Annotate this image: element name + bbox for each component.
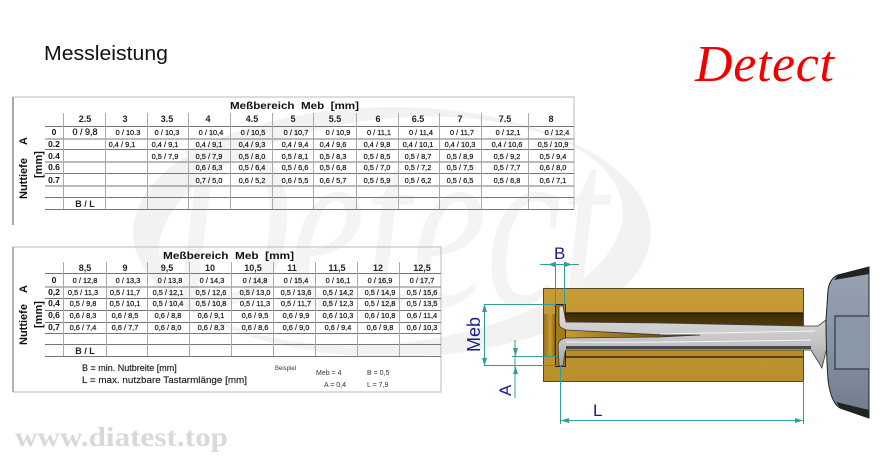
table values: 0,5 / 14,2 xyxy=(323,288,353,297)
column headers: 10,5 xyxy=(244,263,262,273)
table values: 0,5 / 9,2 xyxy=(494,152,520,161)
row headers: 0,2 xyxy=(48,287,60,297)
table values: 0 / 12,8 xyxy=(73,276,97,285)
row headers: 0.2 xyxy=(48,139,60,149)
table values: 0 / 10,9 xyxy=(326,128,350,137)
table values: 0,5 / 11,7 xyxy=(110,288,140,297)
table values: 0 / 10,4 xyxy=(199,128,223,137)
table values: 0,5 / 13,0 xyxy=(240,288,270,297)
axis label: Nuttiefe A: [mm] xyxy=(33,301,45,328)
table values: 0,6 / 9,9 xyxy=(283,311,309,320)
column headers: 5.5 xyxy=(329,114,341,124)
table values: 0 / 13,8 xyxy=(158,276,182,285)
example values: L = 7,9 xyxy=(367,382,388,389)
column headers: 9 xyxy=(122,263,128,273)
table values: 0,6 / 8,8 xyxy=(155,311,181,320)
column headers: 7.5 xyxy=(499,114,511,124)
column headers: 6.5 xyxy=(412,114,424,124)
table values: 0,6 / 5,5 xyxy=(282,176,308,185)
column headers: B / L xyxy=(75,346,95,356)
dimension label: Meb: Meb xyxy=(464,317,484,352)
table values: 0,5 / 10,4 xyxy=(153,299,183,308)
column headers: 5 xyxy=(290,114,296,124)
table values: 0,4 / 9,1 xyxy=(196,140,222,149)
table values: 0 / 12,1 xyxy=(496,128,520,137)
table values: 0 / 16,1 xyxy=(326,276,350,285)
table values: 0,5 / 8,7 xyxy=(405,152,431,161)
table values: 0,6 / 6,3 xyxy=(196,163,222,172)
watermark: Detect oval logo: Detect xyxy=(166,91,612,357)
column headers: 11,5 xyxy=(328,263,346,273)
table values: 0,6 / 8,3 xyxy=(198,323,224,332)
table values: 0 / 10,3 xyxy=(155,128,179,137)
heading: Meßbereich Meb: Meßbereich Meb [mm] xyxy=(163,250,294,262)
table values: 0,6 / 8,0 xyxy=(155,323,181,332)
table values: 0,4 / 9,3 xyxy=(239,140,265,149)
table values: 0,5 / 12,1 xyxy=(153,288,183,297)
axis label: Nuttiefe A xyxy=(18,285,45,345)
table values: 0,5 / 6,8 xyxy=(320,163,346,172)
column headers: 2.5 xyxy=(79,114,91,124)
table values: 0,4 / 10,1 xyxy=(403,140,433,149)
table values: 0,5 / 8,3 xyxy=(320,152,346,161)
table values: 0,6 / 7,7 xyxy=(112,323,138,332)
table values: 0,5 / 7,9 xyxy=(196,152,222,161)
column headers: 4.5 xyxy=(246,114,258,124)
dimension label: L: L xyxy=(593,401,602,420)
table values: 0 / 14,3 xyxy=(200,276,224,285)
table values: 0,5 / 9,8 xyxy=(70,299,96,308)
table values: 0,5 / 7,5 xyxy=(447,163,473,172)
axis label: Nuttiefe A: [mm] xyxy=(33,151,45,178)
table values: 0 / 11,7 xyxy=(450,128,474,137)
column headers: 4 xyxy=(205,114,211,124)
row headers: 0.4 xyxy=(48,151,60,161)
table values: 0,5 / 10,9 xyxy=(538,140,568,149)
row headers xyxy=(48,275,60,332)
panel: table 8,5 to 12,5 mm xyxy=(13,247,441,392)
column headers: 12 xyxy=(373,263,383,273)
table values: 0 / 13,3 xyxy=(116,276,140,285)
table values: 0,5 / 7,9 xyxy=(152,152,178,161)
table values: 0 / 15,4 xyxy=(284,276,308,285)
dimension lines xyxy=(484,262,804,424)
example values: Beispiel xyxy=(275,366,296,372)
logo: Detect: Detect xyxy=(694,36,836,93)
row headers: 0,6 xyxy=(48,310,60,320)
table values: 0 / 10.3 xyxy=(116,128,140,137)
column headers xyxy=(75,114,554,209)
panel: table 2.5 to 8 mm xyxy=(13,97,574,225)
title: Messleistung: Messleistung xyxy=(44,43,168,65)
table values: 0,5 / 12,6 xyxy=(196,288,226,297)
table values: 0,5 / 12,8 xyxy=(365,299,395,308)
table values: 0,6 / 7,4 xyxy=(70,323,96,332)
axis label: Nuttiefe A: A xyxy=(18,137,30,145)
table values: 0,5 / 7,0 xyxy=(364,163,390,172)
table values: 0,5 / 7,7 xyxy=(494,163,520,172)
axis label: Nuttiefe A: A xyxy=(18,285,30,293)
table values: 0,5 / 6,5 xyxy=(447,176,473,185)
table values: 0,6 / 8,3 xyxy=(70,311,96,320)
row headers: 0.7 xyxy=(48,175,60,185)
table values: 0 / 9,8 xyxy=(72,127,98,137)
table values: 0,5 / 15,6 xyxy=(407,288,437,297)
table values: 0,5 / 5,9 xyxy=(364,176,390,185)
table values: 0,5 / 13,6 xyxy=(281,288,311,297)
column headers: B / L xyxy=(75,199,95,209)
heading: Meßbereich Meb: Meßbereich Meb [mm] xyxy=(230,101,359,112)
table values: 0,6 / 9,0 xyxy=(283,323,309,332)
table values: 0,5 / 8,1 xyxy=(282,152,308,161)
table values xyxy=(68,276,437,332)
example values: B = 0,5 xyxy=(367,370,389,377)
column headers: 9,5 xyxy=(161,263,173,273)
table values: 0 / 10,7 xyxy=(284,128,308,137)
column headers xyxy=(75,263,431,356)
table values: 0,4 / 10,6 xyxy=(492,140,522,149)
axis label: Nuttiefe A: Nuttiefe xyxy=(18,304,30,345)
table values: 0,6 / 9,5 xyxy=(242,311,268,320)
table values: 0,6 / 5,2 xyxy=(239,176,265,185)
table values: 0,6 / 9,1 xyxy=(198,311,224,320)
table values: 0 / 11,1 xyxy=(367,128,391,137)
table values xyxy=(72,127,569,185)
table values: 0,4 / 9,1 xyxy=(152,140,178,149)
table values: 0,5 / 11,7 xyxy=(281,299,311,308)
table values: 0 / 14,8 xyxy=(243,276,267,285)
table values: 0,4 / 9,4 xyxy=(282,140,308,149)
table values: 0,5 / 10,1 xyxy=(110,299,140,308)
table values: 0,5 / 10,8 xyxy=(196,299,226,308)
table values: 0,6 / 8,0 xyxy=(540,163,566,172)
row headers xyxy=(48,127,60,185)
table values: 0,7 / 5,0 xyxy=(196,176,222,185)
workpiece block xyxy=(544,288,804,382)
table values: 0,5 / 13,5 xyxy=(407,299,437,308)
table values: 0,5 / 7,2 xyxy=(405,163,431,172)
table values: 0,5 / 12,3 xyxy=(323,299,353,308)
table values: 0,5 / 6,6 xyxy=(282,163,308,172)
column headers: 12,5 xyxy=(413,263,431,273)
table values: 0 / 11,4 xyxy=(409,128,433,137)
table values: 0,5 / 14,9 xyxy=(365,288,395,297)
legend: B and L definitions xyxy=(82,363,247,385)
column headers: 11 xyxy=(287,263,297,273)
table values: 0,6 / 5,7 xyxy=(320,176,346,185)
column headers: 8 xyxy=(548,114,554,124)
table values: 0,5 / 6,8 xyxy=(494,176,520,185)
row headers: 0 xyxy=(52,275,57,285)
table values: 0,5 / 8,5 xyxy=(364,152,390,161)
table values: 0,6 / 9,4 xyxy=(325,323,351,332)
column headers: 7 xyxy=(457,114,463,124)
diagram: groove measurement xyxy=(464,244,869,424)
table values: 0,6 / 9,8 xyxy=(367,323,393,332)
table values: 0,6 / 7,1 xyxy=(540,176,566,185)
column headers: 3.5 xyxy=(161,114,173,124)
watermark url: www.diatest.top xyxy=(15,422,228,452)
row headers: 0,4 xyxy=(48,298,60,308)
table values: 0,6 / 10,3 xyxy=(407,323,437,332)
table values: 0 / 17,7 xyxy=(410,276,434,285)
table values: 0,4 / 9,8 xyxy=(364,140,390,149)
legend: B and L definitions: B = min. Nutbreite [mm] xyxy=(82,363,177,373)
table values: 0,5 / 11,3 xyxy=(68,288,98,297)
table values: 0,5 / 8,9 xyxy=(447,152,473,161)
table values: 0,6 / 8,6 xyxy=(242,323,268,332)
example values: Meb = 4 xyxy=(316,370,342,377)
example values xyxy=(275,366,389,389)
axis label: Nuttiefe A xyxy=(18,137,45,199)
dimension label: A: A xyxy=(496,384,515,396)
table values: 0 / 12,4 xyxy=(545,128,569,137)
example values: A = 0,4 xyxy=(324,382,346,389)
table values: 0,5 / 9,4 xyxy=(540,152,566,161)
gauge head xyxy=(826,267,869,418)
table values: 0 / 10,5 xyxy=(241,128,265,137)
table values: 0,5 / 6,4 xyxy=(239,163,265,172)
probe arms xyxy=(558,306,827,368)
table values: 0,4 / 9,1 xyxy=(109,140,135,149)
table values: 0,5 / 8,0 xyxy=(239,152,265,161)
row headers: 0.6 xyxy=(48,162,60,172)
axis label: Nuttiefe A: Nuttiefe xyxy=(18,158,30,199)
column headers: 3 xyxy=(122,114,128,124)
table values: 0,5 / 6,2 xyxy=(405,176,431,185)
table values: 0,6 / 10,8 xyxy=(365,311,395,320)
table values: 0,4 / 10,3 xyxy=(445,140,475,149)
table values: 0,4 / 9,6 xyxy=(320,140,346,149)
table values: 0,6 / 11,4 xyxy=(407,311,437,320)
legend: B and L definitions: L = max. nutzbare Tastarmlänge [mm] xyxy=(82,375,247,385)
table values: 0,5 / 11,3 xyxy=(240,299,270,308)
table values: 0 / 16,9 xyxy=(368,276,392,285)
row headers: 0,7 xyxy=(48,322,60,332)
table values: 0,6 / 10,3 xyxy=(323,311,353,320)
column headers: 8,5 xyxy=(79,263,91,273)
column headers: 6 xyxy=(375,114,381,124)
table values: 0,6 / 8,5 xyxy=(112,311,138,320)
dimension label: B: B xyxy=(554,244,565,263)
arrowheads xyxy=(482,262,803,423)
row headers: 0 xyxy=(52,127,57,137)
column headers: 10 xyxy=(205,263,215,273)
